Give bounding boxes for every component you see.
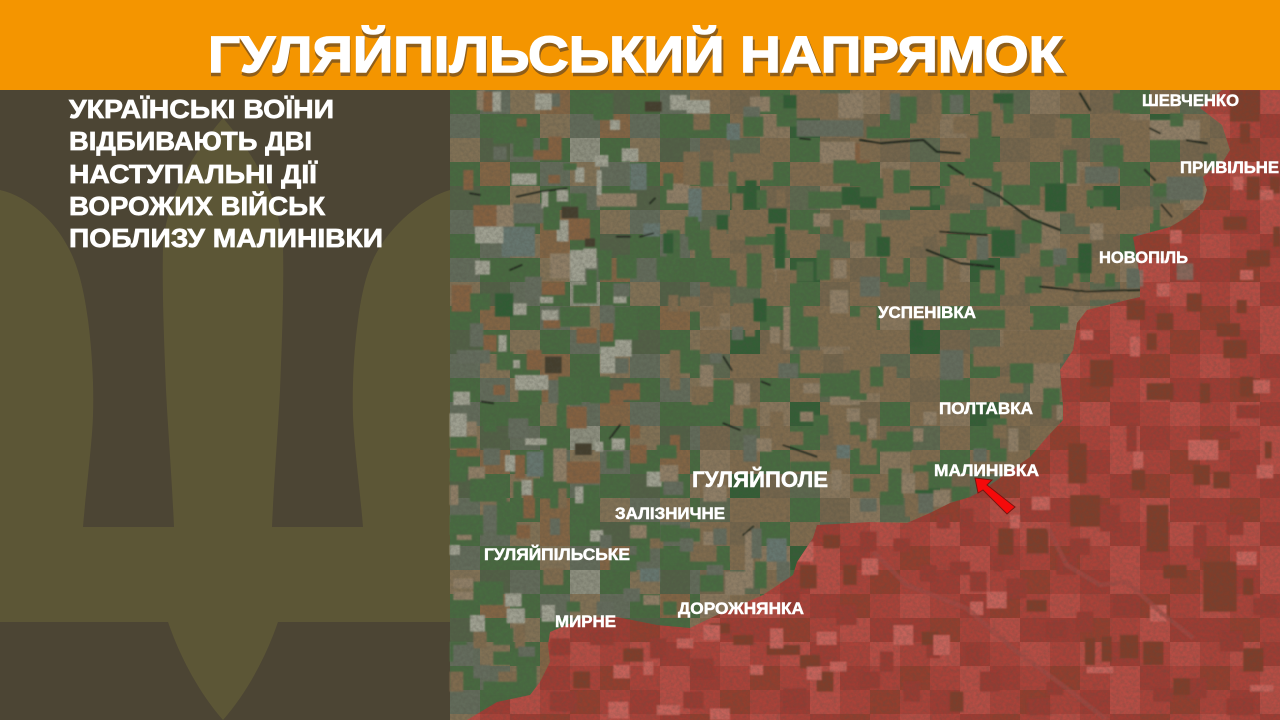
map labels: ДОРОЖНЯНКА <box>678 600 804 618</box>
map labels <box>484 92 1279 631</box>
summary text <box>69 94 383 253</box>
header bar <box>0 0 1280 90</box>
texture noise <box>450 90 1280 720</box>
summary text: ВОРОЖИХ ВІЙСЬК <box>69 191 325 221</box>
title: ГУЛЯЙПІЛЬСЬКИЙ НАПРЯМОК <box>208 28 1067 86</box>
arrow: towards Malynivka <box>975 478 1015 514</box>
left panel <box>0 90 450 720</box>
map labels: УСПЕНІВКА <box>878 304 976 322</box>
map labels: ШЕВЧЕНКО <box>1142 92 1239 110</box>
title: ГУЛЯЙПІЛЬСЬКИЙ НАПРЯМОК <box>208 25 1064 83</box>
map labels: МИРНЕ <box>555 613 616 631</box>
russian-occupied territory overlay <box>450 90 1280 720</box>
map labels: ПОЛТАВКА <box>939 400 1033 418</box>
map labels: МАЛИНІВКА <box>934 462 1039 480</box>
map labels: ЗАЛІЗНИЧНЕ <box>615 505 725 523</box>
satellite map <box>450 90 1280 720</box>
summary text: УКРАЇНСЬКІ ВОЇНИ <box>69 94 334 124</box>
farmland fields <box>450 90 1217 695</box>
summary text: ПОБЛИЗУ МАЛИНІВКИ <box>69 223 383 253</box>
muted tint over farmland <box>450 90 1280 720</box>
map labels: ГУЛЯЙПОЛЕ <box>692 467 828 492</box>
dark ravines and ponds <box>470 93 1207 535</box>
summary text: ВІДБИВАЮТЬ ДВІ <box>69 126 312 156</box>
summary text: НАСТУПАЛЬНІ ДІЇ <box>69 159 318 189</box>
map labels: ГУЛЯЙПІЛЬСЬКЕ <box>484 545 630 564</box>
trident emblem <box>0 118 450 720</box>
map labels: НОВОПІЛЬ <box>1099 249 1188 267</box>
map labels: ПРИВІЛЬНЕ <box>1180 159 1279 177</box>
